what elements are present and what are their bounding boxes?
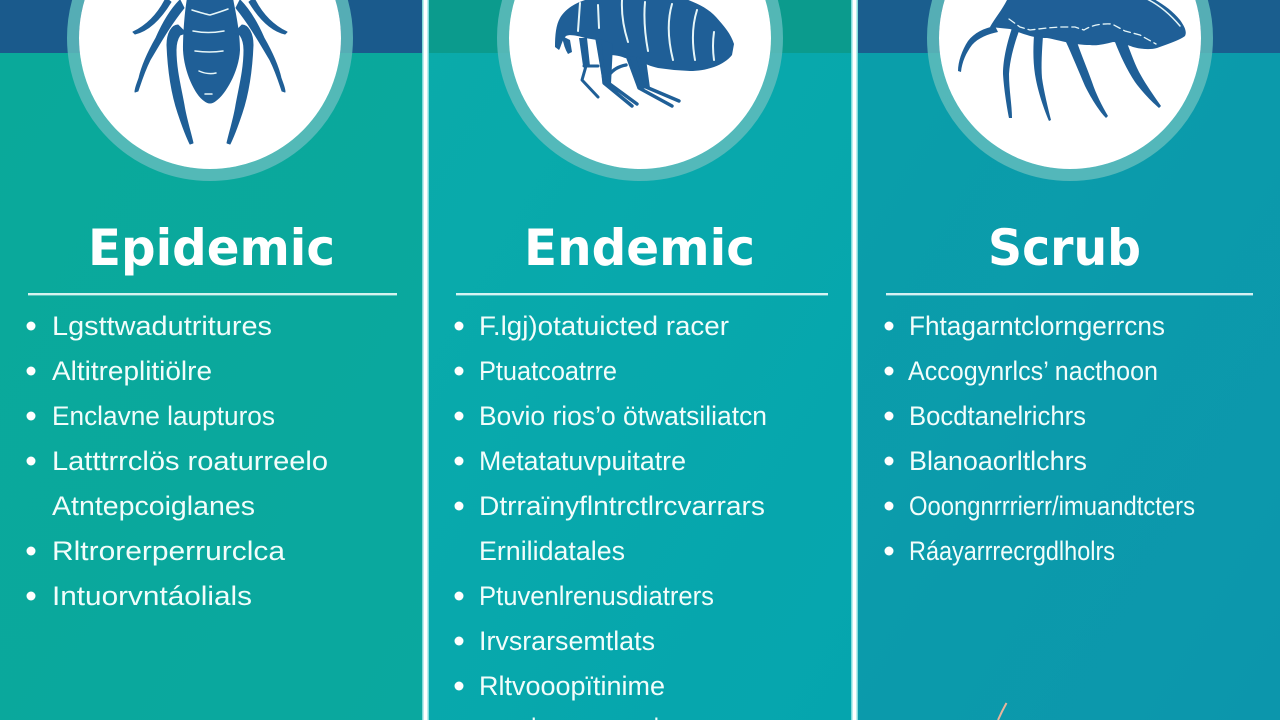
list: endemic bullets: Irvsrarsemtlats (479, 626, 655, 656)
list: epidemic bullets: Enclavne laupturos (52, 401, 275, 431)
list: endemic bullets: Metatatuvpuitatre (479, 446, 686, 476)
list: endemic bullets: Dtrraïnyflntrctlrcvarrars (479, 491, 765, 521)
heading: Endemic: Endemic (524, 219, 755, 277)
list: endemic bullets (454, 311, 767, 720)
icon: flea in circle (503, 0, 777, 175)
list: scrub bullets (884, 311, 1195, 566)
list: endemic bullets: Rltvooopïtinime (479, 671, 665, 701)
list: epidemic bullets: Atntepcoiglanes (52, 491, 255, 521)
list: endemic bullets: F.lgj)otatuicted racer (479, 311, 729, 341)
list: scrub bullets: Accogynrlcs’ nacthoon (908, 356, 1158, 386)
list: endemic bullets: Bovio rios’o ötwatsiliatcn (479, 401, 767, 431)
list: scrub bullets: Ooongnrrrierr/imuandtcters (909, 491, 1195, 521)
panel: epidemic (0, 0, 424, 720)
list: endemic bullets: Ptuatcoatrre (479, 356, 617, 386)
list: epidemic bullets: Lgsttwadutritures (52, 311, 272, 341)
icon: chigger mite in circle (933, 0, 1207, 175)
list: endemic bullets: Ernilidatales (479, 536, 625, 566)
mark: orange stroke at the bottom edge (998, 703, 1006, 720)
panel: scrub (856, 0, 1280, 720)
list: epidemic bullets: Rltrorerperrurclca (52, 536, 286, 566)
list: epidemic bullets: Intuorvntáolials (52, 581, 252, 611)
panel: endemic (428, 0, 852, 720)
icon: body louse in circle (73, 0, 347, 175)
list: epidemic bullets (26, 311, 328, 611)
list: scrub bullets: Fhtagarntclorngerrcns (909, 311, 1165, 341)
list: epidemic bullets: Altitreplitiölre (52, 356, 212, 386)
list: endemic bullets: Ptuvenlrenusdiatrers (479, 581, 714, 611)
list: scrub bullets: Bocdtanelrichrs (909, 401, 1086, 431)
list: epidemic bullets: Latttrrclös roaturreelo (52, 446, 328, 476)
list: scrub bullets: Blanoaorltlchrs (909, 446, 1087, 476)
heading: Epidemic: Epidemic (88, 219, 335, 277)
heading: Scrub: Scrub (988, 219, 1141, 277)
list: scrub bullets: Ráayarrrecrgdlholrs (909, 536, 1115, 566)
